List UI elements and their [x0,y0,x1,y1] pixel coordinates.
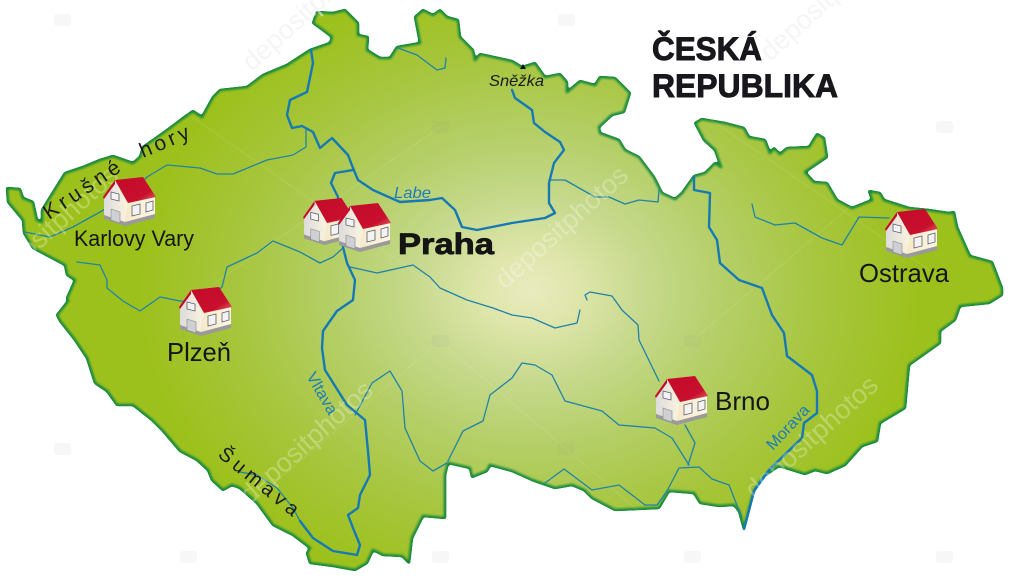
river: Berounka [77,241,343,311]
label: Vltava: Vltava [303,370,340,418]
thin river network [25,48,889,521]
city: Plzeň: Plzeň [167,337,231,367]
river: Dyje [545,467,742,518]
title: Česká republika [652,31,838,104]
city: Praha [303,198,494,261]
thick rivers [287,50,817,555]
city: Karlovy Vary [74,177,194,251]
river: Lužnice branch [448,363,689,465]
city: Ostrava [859,209,950,288]
city: Brno [655,376,770,425]
label: Sněžka peak [489,64,544,90]
watermark: depositphotos: depositphotos [234,375,379,509]
river: Jizera headwater [398,48,446,70]
label: Krušné hory: Krušné [39,156,125,224]
city: Praha: Praha [398,228,494,261]
river: Otava branch [355,371,447,471]
river: Labe [287,50,564,230]
river: Sázava [350,265,580,328]
title: Česká republika: ČESKÁ [652,31,762,67]
label: Morava: Morava [763,402,814,454]
watermark: depositphotos: depositphotos [739,370,884,504]
title: Česká republika: REPUBLIKA [652,68,838,104]
river: Orlice [550,180,659,204]
river: Svitava [685,425,695,465]
city: Plzeň [167,287,232,367]
river: Svratka [585,292,659,381]
label: Krušné hory [39,121,193,224]
city: Karlovy Vary: Karlovy Vary [74,226,194,251]
watermark: depositphotos: depositphotos [489,160,634,294]
river: Vltava [300,170,370,555]
label: Labe: Labe [394,185,431,202]
city: Ostrava: Ostrava [859,258,950,288]
watermark: depositphotos [0,0,899,509]
label: Šumava: Šumava [214,442,304,521]
label: Sněžka peak: Sněžka [489,73,544,90]
city: Brno: Brno [715,386,770,416]
river: Morava [694,177,817,529]
label: Krušné hory: hory [136,121,193,163]
river: Ohře [25,128,306,237]
river: upper Vltava [240,472,300,521]
river: Odra [752,204,889,245]
